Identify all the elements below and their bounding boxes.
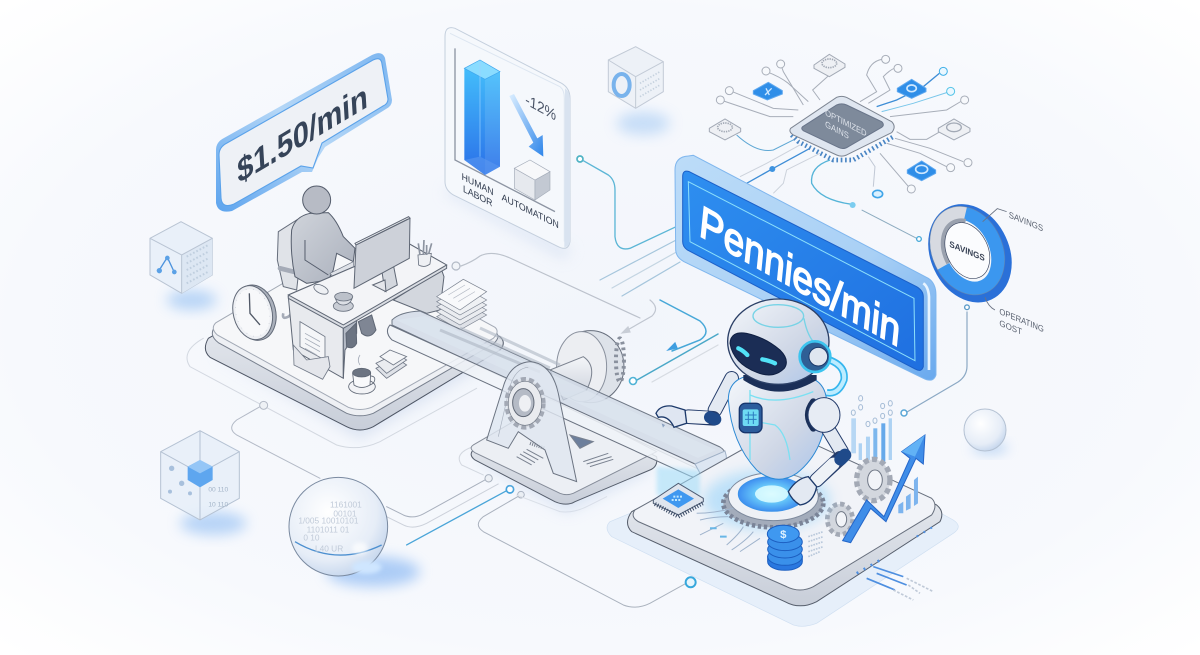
platform: robot scene — [607, 299, 958, 626]
robot right hand — [788, 477, 817, 505]
growth arrow — [843, 435, 925, 543]
donut ring — [916, 194, 1019, 307]
sphere: binary data globe: 0 10 — [303, 533, 320, 543]
coin stack: $ — [780, 529, 787, 541]
bar: automation — [514, 160, 550, 200]
connector: centre lines to sign — [452, 238, 967, 416]
mini bar chart — [851, 396, 918, 513]
label: automation: AUTOMATION — [502, 192, 559, 232]
label: operating cost — [985, 297, 1044, 337]
clock — [227, 280, 282, 345]
robot head — [728, 299, 830, 384]
sign text: Pennies/min — [697, 196, 902, 357]
platform halo — [607, 440, 958, 626]
conveyor belt — [387, 311, 726, 478]
node — [686, 577, 696, 587]
donut centre label: SAVINGS — [949, 239, 985, 263]
cube: glass cube with blue core: 10 110 — [208, 502, 228, 509]
robot left hand — [656, 406, 687, 428]
robot body — [728, 375, 827, 479]
cube: network node — [150, 222, 217, 310]
platform: central conveyor and gear — [471, 331, 657, 513]
gear arch housing — [487, 362, 577, 482]
computer monitor — [354, 217, 410, 292]
robot — [656, 299, 845, 505]
coffee cup — [349, 355, 375, 394]
sphere: binary data globe: 00101 — [333, 509, 357, 519]
cube: glass cube with blue core: 00 110 — [208, 487, 228, 494]
label: operating cost: OPERATING — [999, 306, 1044, 334]
file holder — [293, 322, 330, 379]
chip label: OPTIMIZED — [825, 107, 867, 139]
desk items — [312, 240, 432, 311]
robot cable — [817, 357, 844, 393]
label: savings: SAVINGS — [1009, 209, 1044, 234]
sphere: binary data globe: 1101011 01 — [307, 525, 350, 535]
arrow: downward trend — [509, 94, 543, 157]
robot chest panel — [739, 403, 762, 433]
circuit traces — [716, 55, 972, 241]
gears — [827, 459, 890, 535]
platform body — [627, 428, 942, 606]
microchip — [790, 96, 894, 160]
donut chart: savings — [916, 194, 1044, 337]
gear base disc — [723, 473, 823, 527]
robot right arm — [808, 402, 845, 480]
label: operating cost: GOST — [999, 318, 1023, 337]
chip circuit cluster — [709, 54, 972, 241]
sphere: binary data globe — [289, 477, 420, 587]
etched traces — [697, 508, 760, 552]
small data text — [808, 532, 823, 557]
chip label: GAINS — [825, 119, 849, 141]
price text: $1.50/min — [236, 77, 369, 192]
disc glow — [703, 470, 830, 530]
connector: teal line from chart to sign — [577, 156, 683, 249]
speech bubble: $1.50/min — [216, 53, 392, 212]
keyboard — [330, 262, 355, 286]
robot shoulder — [808, 398, 840, 432]
book stack — [376, 350, 407, 378]
chart axes — [455, 48, 555, 212]
person — [291, 186, 355, 283]
label: human labor: LABOR — [463, 184, 492, 210]
platform shadow — [217, 293, 493, 440]
gear — [507, 379, 543, 427]
binary digits: 1161001 — [330, 500, 362, 510]
desk — [288, 243, 447, 378]
connector dot — [965, 305, 969, 310]
circuit etch — [517, 435, 613, 467]
coin stack — [767, 525, 802, 570]
chip icons — [709, 54, 970, 181]
axle — [550, 357, 592, 400]
base plate — [471, 398, 657, 504]
platform: human desk scene — [205, 186, 503, 440]
desk chair — [277, 220, 300, 290]
connector: left platform halo and sphere link — [187, 338, 685, 607]
base shadow — [477, 423, 653, 513]
platform base — [205, 246, 503, 430]
paper stack — [437, 279, 487, 330]
sphere: binary data globe: L40 UR — [315, 544, 343, 554]
panel: bar chart human labor vs automation — [443, 28, 573, 260]
label: savings — [983, 209, 1044, 234]
connector lines — [187, 156, 967, 607]
bar: human labor — [464, 60, 500, 175]
back wheel — [557, 331, 624, 403]
robot left arm — [688, 378, 732, 419]
cube: donut icon — [608, 47, 670, 135]
label: -12%: -12% — [525, 91, 557, 125]
sphere: binary data globe: 1/005 10010101 — [298, 515, 359, 525]
small sphere — [964, 409, 1008, 454]
sign: Pennies/min — [675, 155, 936, 380]
label: human labor: HUMAN — [462, 171, 494, 199]
cube: glass cube with blue core — [161, 431, 247, 535]
vent lines — [867, 567, 933, 600]
small chip with glow beams — [653, 467, 703, 517]
